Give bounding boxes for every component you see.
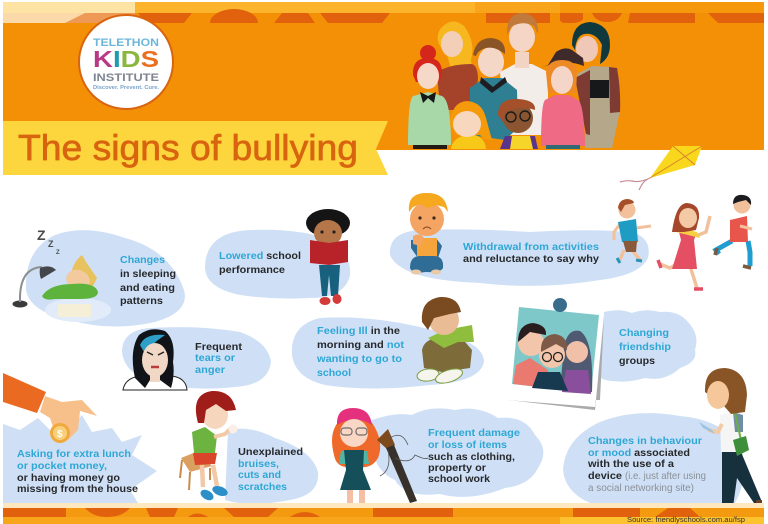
panel: changes in sleeping bbox=[12, 227, 185, 327]
panel: unexplained bruises bbox=[180, 391, 318, 504]
person: girl with hat and pink sweater bbox=[540, 48, 585, 149]
icon: sad boy bbox=[409, 193, 448, 274]
text: unexplained: Unexplained bbox=[238, 446, 303, 458]
logo: INSTITUTE bbox=[93, 72, 159, 84]
text: changes in sleeping: Changes bbox=[120, 254, 165, 266]
text: damage: or loss of items bbox=[428, 439, 507, 451]
text: changes in behaviour: Changes in behaviour bbox=[588, 435, 702, 447]
footer band bbox=[3, 503, 764, 524]
child: boy in red shirt bbox=[715, 195, 752, 268]
person: girl with red hair bbox=[408, 45, 451, 149]
text: feeling ill: morning and not bbox=[317, 339, 405, 351]
icon: girl with glasses bbox=[332, 408, 380, 503]
panel: lowered school performance bbox=[205, 209, 350, 305]
text: damage: property or bbox=[428, 462, 486, 474]
person: blond child bbox=[450, 101, 492, 149]
panel: changes in behaviour bbox=[563, 368, 762, 508]
text: lowered school performance bbox=[219, 250, 301, 276]
text: changes in behaviour bbox=[587, 435, 706, 494]
icon: boy on chair bbox=[180, 391, 238, 502]
child: boy in blue shirt bbox=[614, 199, 651, 263]
text: feeling ill: Feeling Ill in the bbox=[317, 325, 400, 337]
illustration: polaroid photo bbox=[507, 298, 604, 410]
logo bbox=[79, 15, 173, 109]
person: tall boy in white shirt bbox=[500, 13, 548, 135]
panel: damage or loss of items bbox=[332, 408, 543, 503]
text: unexplained: cuts and bbox=[238, 469, 281, 481]
text: feeling ill bbox=[316, 325, 405, 379]
logo: Discover. Prevent. Cure. bbox=[93, 85, 160, 91]
icon: hand with coin bbox=[3, 373, 97, 443]
text: lowered school performance: Lowered school bbox=[219, 250, 301, 262]
text: damage: such as clothing, bbox=[428, 451, 515, 463]
icon: sleep z letters: Z bbox=[56, 250, 60, 256]
person: woman with black bob bbox=[572, 22, 620, 148]
text: asking for money: Asking for extra lunch bbox=[17, 448, 131, 460]
child: girl in red dress bbox=[658, 203, 710, 289]
text: feeling ill: school bbox=[317, 367, 351, 379]
text: changing friendship: groups bbox=[619, 355, 655, 367]
text: withdrawal bbox=[463, 241, 599, 265]
text: unexplained bbox=[238, 446, 303, 493]
icon: hand with coin: $ bbox=[57, 429, 63, 440]
text: frequent tears or anger: anger bbox=[195, 364, 225, 376]
icon: desk lamp bbox=[12, 266, 56, 308]
icon: sleep z letters: Z bbox=[48, 239, 54, 249]
text: damage bbox=[428, 427, 520, 485]
text: changes in sleeping: patterns bbox=[120, 295, 163, 307]
illustration: group of people bbox=[408, 13, 620, 149]
title banner bbox=[3, 121, 388, 175]
source note: Source: friendlyschools.com.au/fsp bbox=[627, 515, 745, 524]
header band bbox=[3, 2, 764, 150]
panel: feeling ill bbox=[292, 297, 484, 388]
title banner: The signs of bullying bbox=[18, 127, 358, 168]
icon: broken guitar bbox=[377, 429, 428, 503]
person: blonde woman bbox=[437, 21, 478, 110]
text: frequent tears or anger bbox=[195, 341, 243, 376]
icon: boy reading bbox=[306, 209, 350, 305]
text: changes in sleeping: in sleeping bbox=[120, 268, 176, 280]
logo: TELETHON bbox=[93, 37, 159, 49]
text: unexplained: bruises, bbox=[238, 458, 279, 470]
text: changes in sleeping: and eating bbox=[120, 282, 175, 294]
icon: sleep z letters bbox=[37, 227, 60, 256]
text: changes in behaviour: a social networking site) bbox=[588, 482, 694, 494]
icon: angry girl bbox=[123, 329, 187, 390]
panel: changing friendship groups bbox=[596, 310, 696, 382]
icon: hunched boy bbox=[416, 297, 474, 386]
illustration: kite bbox=[620, 146, 702, 190]
panel: asking for money bbox=[3, 373, 157, 503]
text: changes in behaviour: or mood associated bbox=[588, 447, 690, 459]
logo: KIDS bbox=[93, 46, 159, 72]
text: damage: Frequent damage bbox=[428, 427, 520, 439]
text: changes in behaviour: (i.e. just after using bbox=[625, 470, 706, 482]
icon: sleep z letters: Z bbox=[37, 227, 46, 243]
text: asking for money: or having money go bbox=[17, 472, 120, 484]
text: lowered school performance: performance bbox=[219, 264, 285, 276]
text: changes in behaviour: with the use of a bbox=[587, 458, 674, 470]
text: changing friendship bbox=[619, 327, 671, 367]
text: frequent tears or anger: tears or bbox=[195, 352, 235, 364]
icon: pin bbox=[553, 298, 567, 312]
text: asking for money: or pocket money, bbox=[17, 460, 107, 472]
panel: frequent tears or anger bbox=[122, 327, 271, 390]
person: boy in teal sweater bbox=[470, 38, 518, 140]
icon: girl walking with phone bbox=[699, 368, 762, 508]
icon: sleeping boy bbox=[42, 255, 98, 317]
panel: withdrawal from activities bbox=[390, 193, 649, 286]
photo: three friends bbox=[513, 323, 592, 394]
text: asking for money: missing from the house bbox=[17, 483, 138, 495]
text: frequent tears or anger: Frequent bbox=[195, 341, 243, 353]
text: withdrawal: and reluctance to say why bbox=[463, 253, 599, 265]
text: changing friendship: Changing bbox=[619, 327, 669, 339]
illustration: running children bbox=[614, 195, 752, 289]
person: boy with glasses bbox=[498, 99, 538, 149]
text: damage: school work bbox=[428, 473, 490, 485]
text: changes in sleeping bbox=[120, 254, 176, 307]
text: changes in behaviour: device bbox=[588, 470, 622, 482]
text: changing friendship: friendship bbox=[619, 341, 671, 353]
text: asking for money bbox=[17, 448, 138, 495]
text: withdrawal: Withdrawal from activities bbox=[463, 241, 599, 253]
text: feeling ill: wanting to go to bbox=[316, 353, 402, 365]
text: unexplained: scratches bbox=[238, 481, 287, 493]
